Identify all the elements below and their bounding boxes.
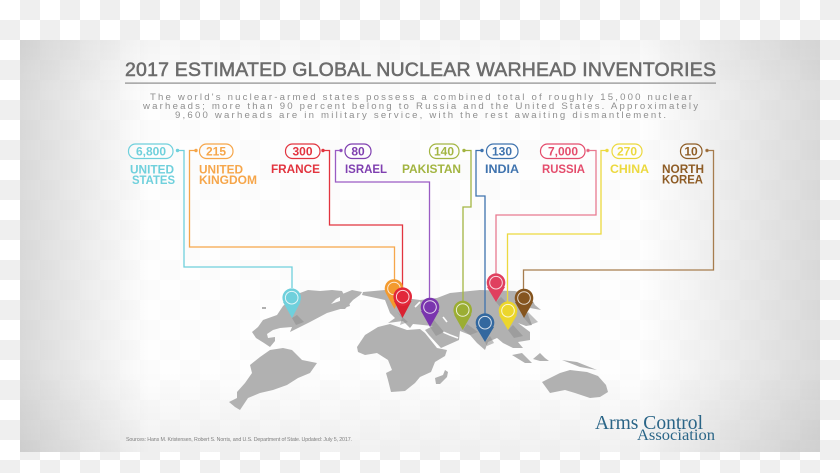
intro text: 9,600 warheads are in military service, with the rest awaiting dismantlement. <box>175 110 666 121</box>
country: India: 130 <box>492 144 512 158</box>
connector: United Kingdom <box>190 149 394 280</box>
country: France: 300 <box>292 144 313 158</box>
pin: United States <box>282 288 301 318</box>
country: France <box>271 144 320 176</box>
map: North America <box>252 290 350 347</box>
world map <box>229 290 608 410</box>
country: Russia: RUSSIA <box>542 162 585 176</box>
connector: India <box>476 149 485 314</box>
map inland seas <box>415 302 458 338</box>
connector: Pakistan <box>463 149 471 301</box>
country: India: INDIA <box>485 162 519 176</box>
country: China: CHINA <box>610 162 649 176</box>
country: Israel: 80 <box>351 144 365 158</box>
country: North Korea <box>662 144 704 186</box>
country: India <box>485 144 519 176</box>
pin: China <box>499 301 517 330</box>
logo: Arms Control Association: Association <box>637 427 715 444</box>
map: Africa <box>357 324 447 392</box>
country: North Korea: 10 <box>684 144 698 158</box>
connector: France <box>322 149 402 288</box>
country: United States: STATES <box>132 173 175 187</box>
country: Russia <box>540 144 585 176</box>
map: small island <box>262 307 266 309</box>
sources note: Sources: Hans M. Kristensen, Robert S. Norris, and U.S. Department of State. Updated: July 5, 2017. <box>126 437 352 443</box>
country: United States: 6,800 <box>136 144 166 158</box>
map: South America <box>229 348 317 410</box>
country: United States: UNITED <box>130 162 174 176</box>
map: New Guinea <box>562 360 597 370</box>
country: Israel: ISRAEL <box>345 162 387 176</box>
country: China <box>610 144 649 176</box>
logo: Arms Control Association <box>595 412 715 444</box>
country: United Kingdom: 215 <box>206 144 226 158</box>
country: North Korea: NORTH <box>662 162 704 176</box>
pin: Russia <box>487 273 505 302</box>
intro text <box>142 92 698 121</box>
connector: United States <box>176 149 292 288</box>
country: Russia: 7,000 <box>548 144 578 158</box>
map: Madagascar <box>435 370 448 384</box>
pin: Israel <box>421 298 439 327</box>
title: 2017 ESTIMATED GLOBAL NUCLEAR WARHEAD INVENTORIES <box>125 59 716 81</box>
map: Greenland <box>340 290 362 309</box>
connector: Russia <box>496 149 596 274</box>
logo: Arms Control Association: Arms Control <box>595 412 703 434</box>
pin: Pakistan <box>453 301 472 330</box>
country: Pakistan <box>402 144 461 176</box>
pin: United Kingdom <box>385 279 403 309</box>
intro text: The world's nuclear-armed states possess a combined total of roughly 15,000 nuclear <box>150 92 693 103</box>
country: Israel <box>345 144 387 176</box>
connector: North Korea <box>524 149 714 290</box>
country: China: 270 <box>617 144 637 158</box>
pin: North Korea <box>515 289 533 318</box>
map: Australia <box>542 370 608 398</box>
pin: India <box>476 313 494 342</box>
intro text: warheads; more than 90 percent belong to Russia and the United States. Approximately <box>142 101 698 112</box>
country: United Kingdom <box>199 144 257 187</box>
country: Pakistan: 140 <box>434 144 454 158</box>
country: France: FRANCE <box>271 162 320 176</box>
map: Southeast Asian islands <box>512 353 532 363</box>
country: United States <box>128 144 175 187</box>
country: United Kingdom: UNITED <box>199 162 243 176</box>
map: Indonesia <box>533 353 549 361</box>
pin: France <box>393 287 412 318</box>
country: United Kingdom: KINGDOM <box>199 173 257 187</box>
connector: Israel <box>336 149 430 298</box>
title rule <box>125 82 716 84</box>
pin shadows <box>292 297 538 346</box>
country: Pakistan: PAKISTAN <box>402 162 461 176</box>
connector: China <box>508 149 608 302</box>
map: Eurasia <box>362 290 541 350</box>
country: North Korea: KOREA <box>662 172 703 186</box>
